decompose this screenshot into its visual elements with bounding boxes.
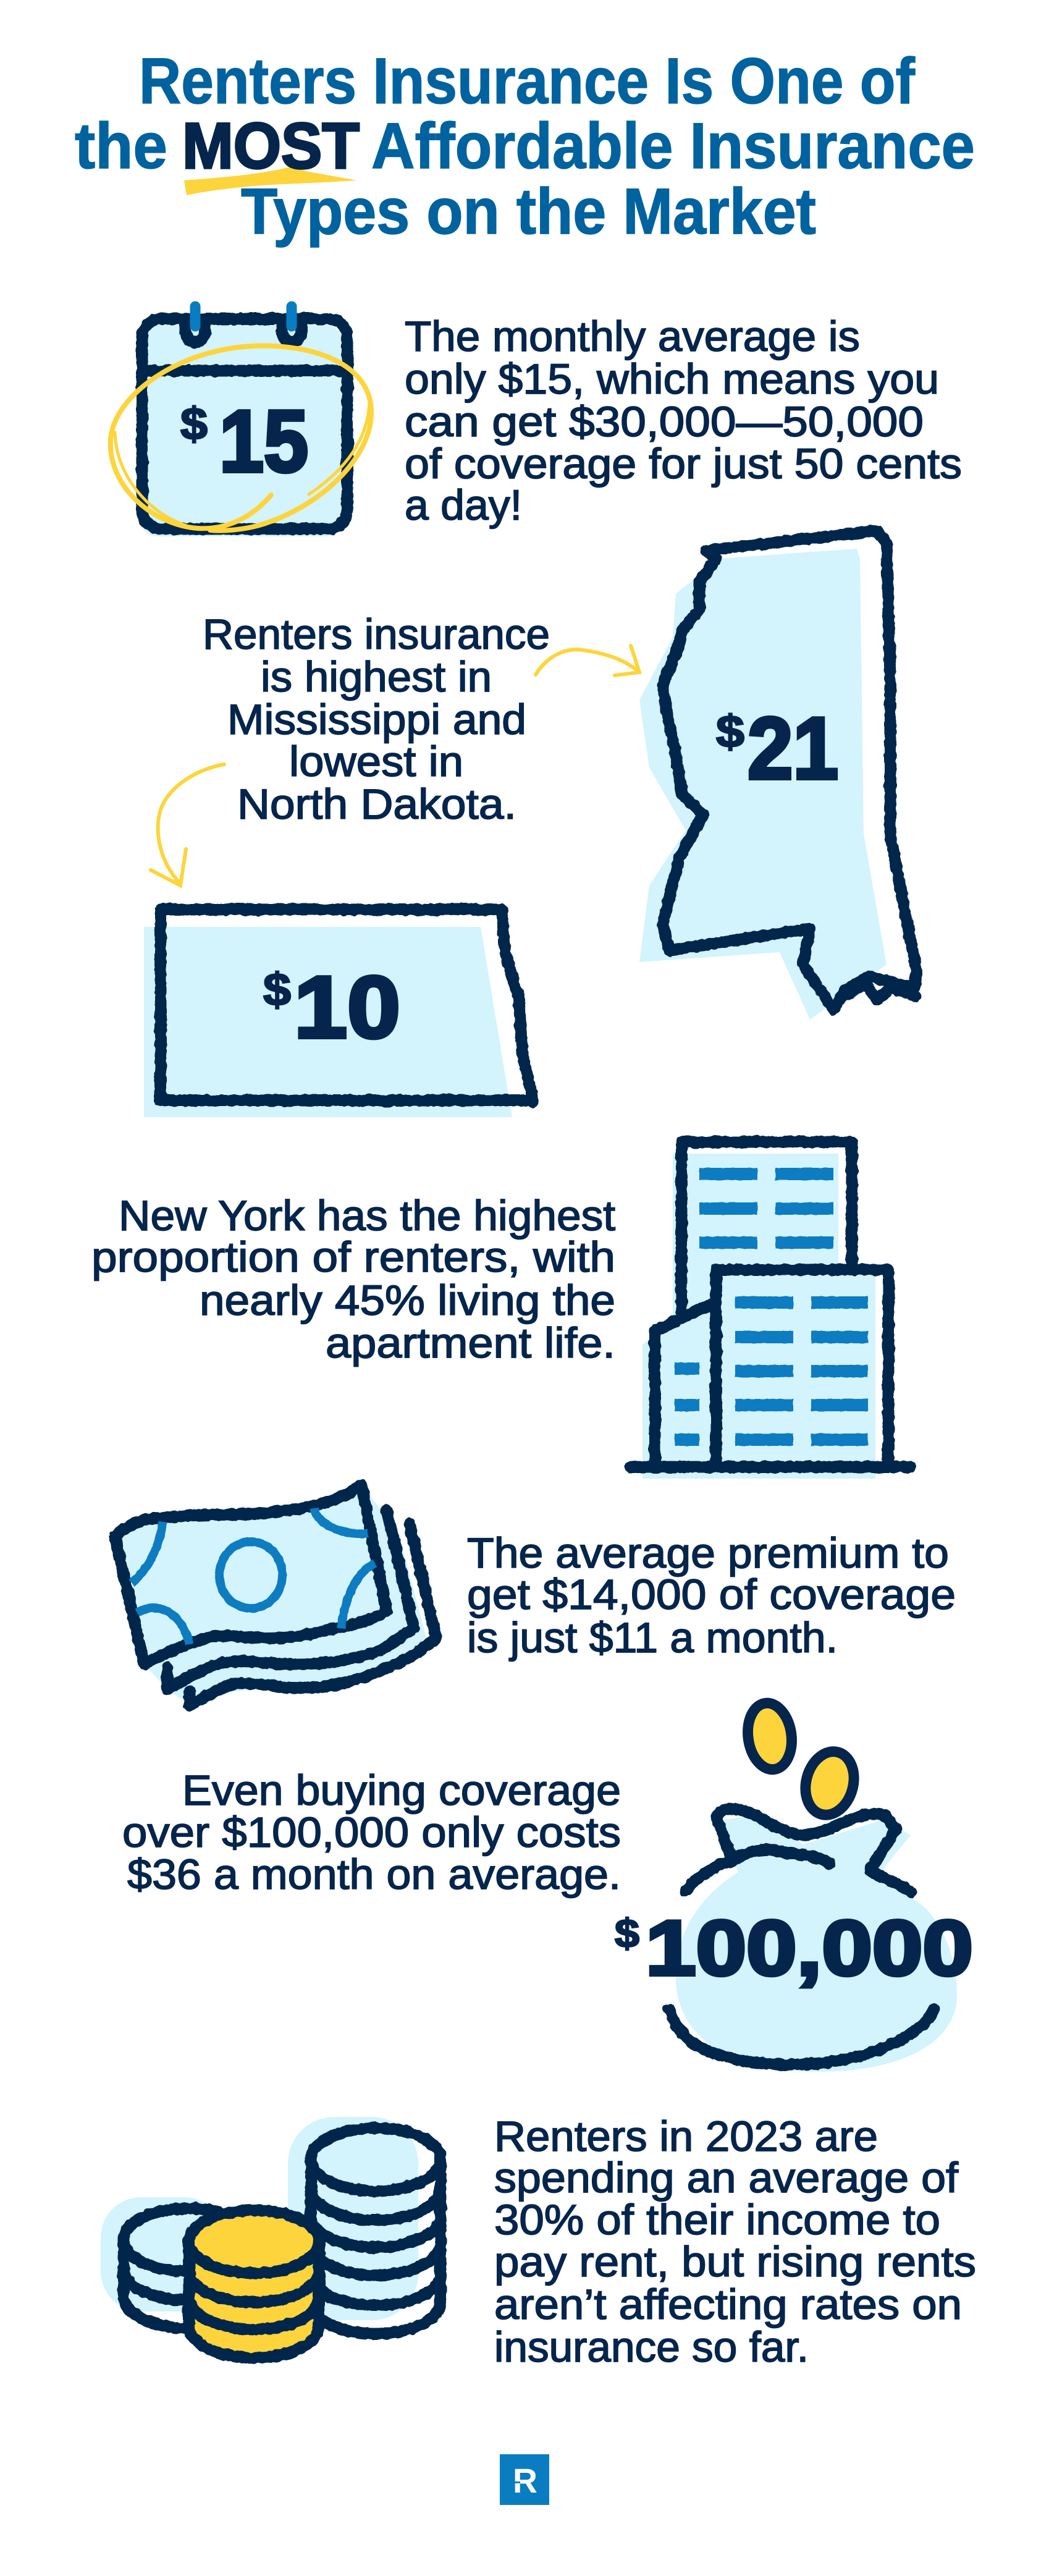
text block: New York renters: nearly 45% living the bbox=[200, 1277, 615, 1324]
text block: average premium: The average premium to bbox=[467, 1529, 949, 1577]
text block: highest and lowest states: Mississippi and bbox=[227, 696, 526, 743]
icon: coin one bbox=[744, 1700, 796, 1772]
icon: Mississippi map with $21 bbox=[639, 531, 917, 1020]
text block: highest and lowest states: is highest in bbox=[261, 653, 492, 701]
icon: money bag with falling coins: 100,000 bbox=[646, 1904, 973, 1991]
text block: monthly average: a day! bbox=[405, 481, 522, 529]
icon: money bag with falling coins: $ bbox=[615, 1911, 639, 1956]
title bbox=[75, 45, 975, 248]
title: MOST bbox=[182, 110, 360, 182]
text block: renters in 2023: pay rent, but rising rents bbox=[494, 2238, 976, 2286]
yellow hand-drawn circle bbox=[111, 346, 371, 531]
icon: apartment buildings bbox=[631, 1142, 910, 1479]
highlight stroke under MOST bbox=[184, 167, 357, 195]
text block: average premium bbox=[467, 1529, 956, 1662]
text block: coverage over $100,000 bbox=[122, 1767, 621, 1898]
icon: North Dakota map with $10: 10 bbox=[294, 958, 400, 1057]
title: Types on the Market bbox=[241, 175, 816, 248]
icon: stack of dollar bills bbox=[115, 1485, 436, 1705]
text block: highest and lowest states bbox=[203, 610, 550, 828]
text block: renters in 2023: 30% of their income to bbox=[494, 2196, 940, 2244]
text block: monthly average bbox=[405, 313, 962, 529]
text block: New York renters bbox=[91, 1192, 615, 1367]
icon: calendar with $15 bbox=[111, 306, 371, 536]
text block: monthly average: only $15, which means you bbox=[405, 355, 939, 403]
title: the bbox=[75, 110, 167, 182]
text block: coverage over $100,000: Even buying coverage bbox=[182, 1767, 621, 1814]
logo bbox=[500, 2454, 549, 2505]
icon: calendar with $15: $ bbox=[180, 399, 208, 449]
icon: money bag with falling coins bbox=[615, 1700, 973, 2072]
text block: renters in 2023: Renters in 2023 are bbox=[494, 2113, 878, 2160]
text block: coverage over $100,000: over $100,000 only costs bbox=[122, 1809, 621, 1856]
left coin stack bbox=[101, 2197, 253, 2328]
text block: renters in 2023: insurance so far. bbox=[494, 2323, 809, 2371]
text block: New York renters: proportion of renters, with bbox=[91, 1233, 615, 1281]
text block: highest and lowest states: lowest in bbox=[289, 738, 463, 785]
title: Renters Insurance Is One of bbox=[139, 45, 916, 117]
icon: Mississippi map with $21: $ bbox=[716, 707, 744, 757]
arrow: to North Dakota bbox=[151, 764, 224, 885]
text block: monthly average: of coverage for just 50 cents bbox=[405, 440, 962, 488]
icon: calendar with $15: 15 bbox=[219, 392, 308, 491]
icon: stacks of coins bbox=[101, 2117, 440, 2358]
text block: coverage over $100,000: $36 a month on average. bbox=[127, 1851, 621, 1898]
text block: average premium: get $14,000 of coverage bbox=[467, 1571, 956, 1618]
arrow: to Mississippi bbox=[536, 646, 639, 675]
text block: monthly average: can get $30,000—50,000 bbox=[405, 398, 924, 446]
text block: highest and lowest states: North Dakota. bbox=[237, 780, 516, 828]
text block: renters in 2023: aren’t affecting rates on bbox=[494, 2281, 962, 2328]
yellow coin stack bbox=[189, 2210, 319, 2358]
icon: coin two bbox=[799, 1746, 861, 1820]
text block: renters in 2023: spending an average of bbox=[494, 2154, 959, 2202]
icon: North Dakota map with $10: $ bbox=[263, 964, 291, 1015]
text block: New York renters: New York has the highest bbox=[119, 1192, 615, 1239]
right coin stack bbox=[288, 2117, 440, 2334]
icon: North Dakota map with $10 bbox=[144, 910, 533, 1117]
text block: highest and lowest states: Renters insurance bbox=[203, 610, 550, 658]
text block: renters in 2023 bbox=[494, 2113, 976, 2371]
text block: average premium: is just $11 a month. bbox=[467, 1614, 838, 1662]
title: Affordable Insurance bbox=[371, 110, 975, 182]
text block: New York renters: apartment life. bbox=[326, 1319, 615, 1367]
icon: Mississippi map with $21: 21 bbox=[748, 699, 838, 798]
text block: monthly average: The monthly average is bbox=[405, 313, 860, 360]
logo: R bbox=[513, 2461, 537, 2500]
